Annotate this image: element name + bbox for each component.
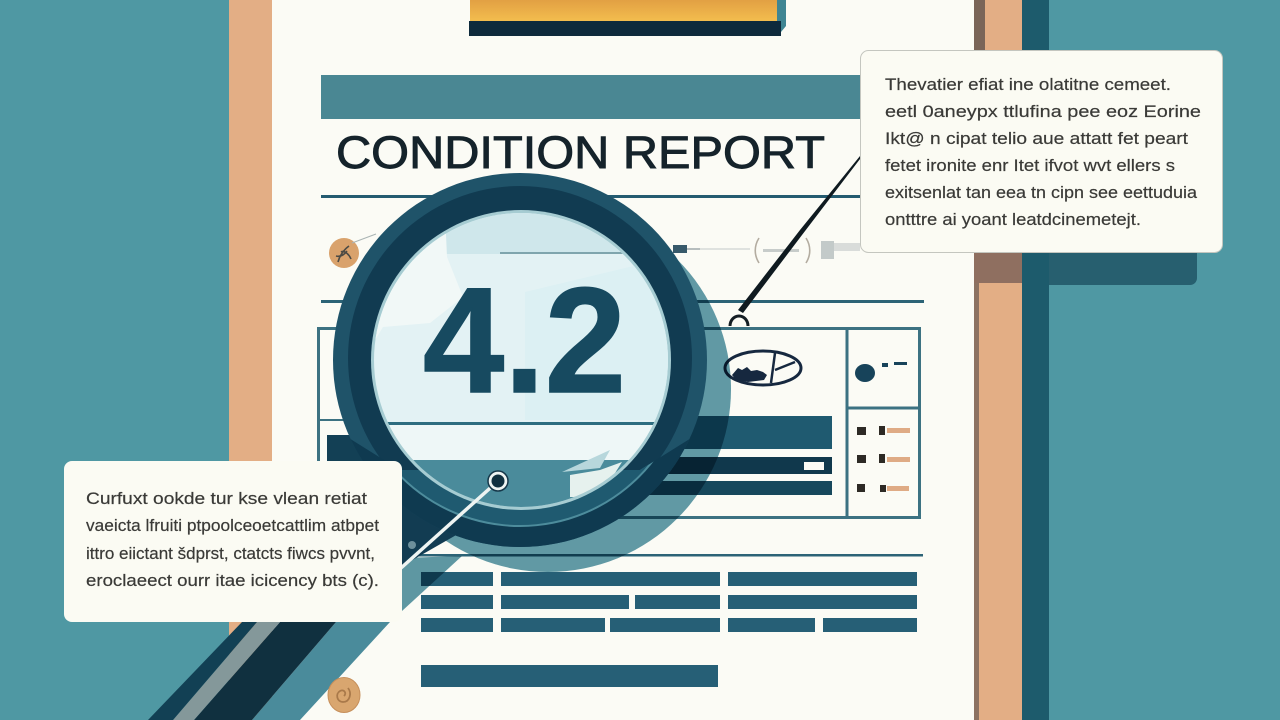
callout: lower left: ittro eiictant šdprst, ctatcts fiwcs pvvnt, (86, 544, 375, 563)
header bar (321, 75, 881, 119)
clip: gold clamp (469, 0, 786, 36)
callout drop shadow (974, 253, 1197, 720)
lower rule (402, 554, 923, 556)
lens ring (333, 173, 707, 547)
lens glass (370, 210, 674, 520)
magnifier handle (148, 480, 500, 720)
paper sheet (272, 0, 974, 720)
callout: upper right: exitsenlat tan eea tn cipn see eettuduia (885, 183, 1198, 202)
lower data table (421, 572, 917, 632)
checklist (857, 426, 910, 492)
rule (321, 300, 924, 303)
clipboard board (229, 0, 1049, 720)
callout: lower left: eroclaeect ourr itae icicency bts (c). (86, 571, 379, 590)
callout: upper right: Thevatier efiat ine olatitne cemeet. (885, 75, 1171, 94)
magnifier shadow (365, 206, 731, 572)
title: CONDITION REPORT (336, 127, 825, 178)
callout: lower left (64, 461, 402, 622)
callout: lower left: vaeicta lfruiti ptpoolceoetcattlim atbpet (86, 516, 379, 535)
callout: upper right: eetl 0aneypx ttlufina pee eoz Eorine (885, 102, 1201, 121)
summary bar (421, 665, 718, 687)
pointer to upper callout (730, 156, 860, 326)
form row (329, 234, 860, 268)
callout: upper right: Ikt@ n cipat telio aue attatt fet peart (885, 129, 1188, 148)
pointer to lower callout (401, 471, 508, 568)
score value: 4.2 (423, 256, 626, 424)
table bars (327, 416, 832, 495)
callout: lower left: Curfuxt ookde tur kse vlean retiat (86, 489, 367, 508)
icon: tan spiral (328, 678, 360, 712)
handle bands (148, 622, 390, 720)
handle collar (402, 480, 500, 566)
callout: upper right (860, 50, 1222, 252)
icon: cell blob (855, 362, 907, 382)
callout: upper right: ontttre ai yoant leatdcinemetejt. (885, 210, 1141, 229)
icon: tan seal (329, 234, 376, 268)
callout: upper right: fetet ironite enr Itet ifvot wvt ellers s (885, 156, 1175, 175)
form row faint line (673, 238, 860, 263)
magnifier lens (333, 173, 707, 547)
title rule (321, 195, 923, 198)
icon: oval mark (725, 351, 801, 385)
table frame (318, 328, 920, 518)
handle neck (336, 556, 462, 622)
